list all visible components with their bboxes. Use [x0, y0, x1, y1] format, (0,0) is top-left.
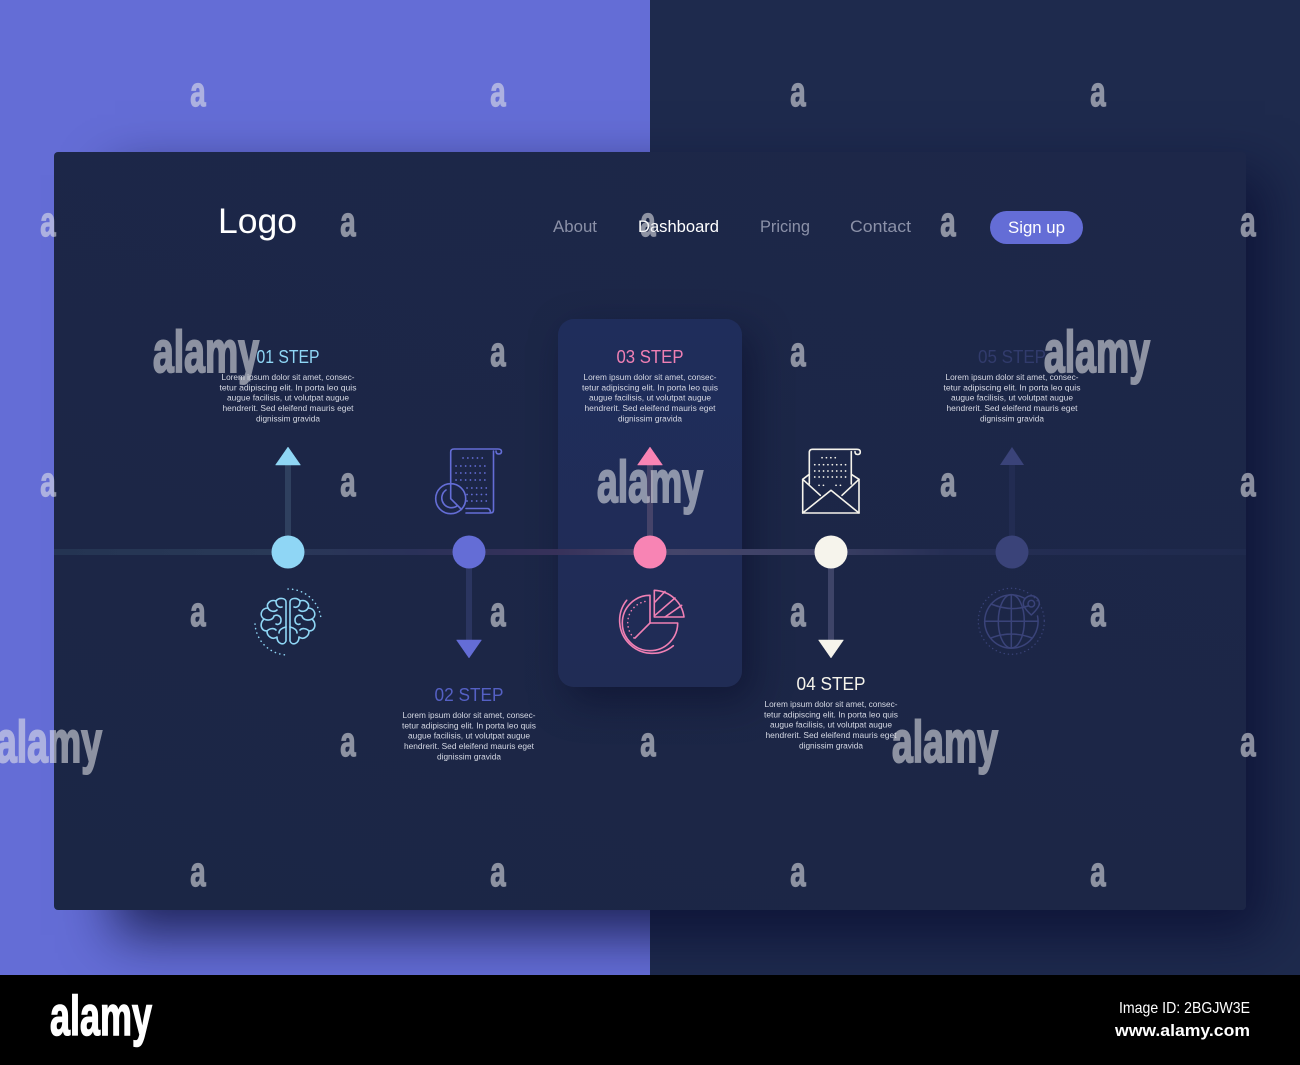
- node: step 4: [814, 536, 848, 568]
- watermarks: a: [1240, 198, 1257, 245]
- heading: 02 step: 02 STEP: [434, 685, 504, 705]
- watermarks: a: [340, 198, 357, 245]
- icon: report with pie chart: [436, 449, 502, 514]
- text block: step 1: [220, 372, 356, 423]
- icon: envelope with letter: [803, 449, 860, 513]
- text block: step 5: augue facilisis, ut volutpat augue: [951, 393, 1073, 403]
- step 5: [944, 347, 1080, 654]
- footer text: [50, 984, 1250, 1047]
- footer bar background: [0, 975, 1300, 1065]
- watermarks: a: [490, 68, 507, 115]
- website: www.alamy.com: [1114, 1021, 1250, 1040]
- watermarks: a: [190, 68, 207, 115]
- text block: step 5: [944, 372, 1080, 423]
- watermarks: a: [1090, 68, 1107, 115]
- text block: step 5: Lorem ipsum dolor sit amet, consec-: [946, 372, 1079, 382]
- text block: step 3: Lorem ipsum dolor sit amet, consec-: [584, 372, 717, 382]
- text block: step 2: hendrerit. Sed eleifend mauris eget: [404, 741, 535, 751]
- text block: step 3: augue facilisis, ut volutpat augue: [589, 393, 711, 403]
- watermarks: a: [1240, 458, 1257, 505]
- text block: step 4: Lorem ipsum dolor sit amet, consec-: [764, 699, 898, 709]
- node: step 3: [634, 536, 666, 568]
- node: step 1: [272, 536, 304, 568]
- text block: step 1: augue facilisis, ut volutpat augue: [227, 393, 349, 403]
- watermarks: a: [40, 198, 57, 245]
- step 4: [764, 449, 898, 750]
- watermarks: a: [790, 328, 807, 375]
- text block: step 2: augue facilisis, ut volutpat augue: [408, 731, 530, 741]
- text block: step 5: tetur adipiscing elit. In porta leo quis: [944, 382, 1080, 392]
- icon: globe with pin: [978, 588, 1044, 654]
- text block: step 4: augue facilisis, ut volutpat augue: [770, 720, 892, 730]
- nav link: pricing: Pricing: [760, 217, 810, 236]
- sign up button: [990, 211, 1083, 244]
- heading: 04 step: 04 STEP: [796, 674, 866, 694]
- icon: brain: [255, 589, 321, 655]
- footer logo: alamy: [50, 984, 152, 1047]
- text block: step 3: [582, 372, 718, 423]
- watermarks: a: [340, 718, 357, 765]
- watermarks: a: [190, 588, 207, 635]
- text block: step 4: hendrerit. Sed eleifend mauris eget: [766, 730, 897, 740]
- text block: step 4: dignissim gravida: [799, 740, 863, 750]
- text block: step 3: tetur adipiscing elit. In porta leo quis: [582, 382, 718, 392]
- arrow down: step 2: [456, 565, 482, 658]
- watermarks: a: [40, 458, 57, 505]
- node: step 2: [452, 536, 486, 568]
- arrow up: step 1: [276, 447, 300, 539]
- watermarks: a: [190, 848, 207, 895]
- watermarks: a: [1240, 718, 1257, 765]
- watermarks: a: [940, 458, 957, 505]
- main card panel: [54, 152, 1246, 910]
- nav link: contact: Contact: [850, 217, 911, 236]
- text block: step 1: dignissim gravida: [256, 413, 320, 423]
- text block: step 4: [764, 699, 898, 750]
- icon: pie chart: [620, 590, 684, 653]
- text block: step 2: tetur adipiscing elit. In porta leo quis: [402, 720, 536, 730]
- card shadow: [160, 220, 1220, 890]
- nav link: about: About: [553, 217, 597, 236]
- timeline bar: [54, 549, 1246, 555]
- watermarks: a: [490, 848, 507, 895]
- watermarks: a: [490, 328, 507, 375]
- text block: step 1: hendrerit. Sed eleifend mauris eget: [222, 403, 354, 413]
- heading: 05 step: 05 STEP: [978, 347, 1046, 367]
- step 1: [220, 347, 356, 655]
- header navigation: [218, 202, 1083, 244]
- text block: step 3: hendrerit. Sed eleifend mauris eget: [584, 403, 716, 413]
- watermarks: a: [340, 458, 357, 505]
- text block: step 1: Lorem ipsum dolor sit amet, consec-: [222, 372, 355, 382]
- watermarks: a: [1090, 848, 1107, 895]
- text block: step 1: tetur adipiscing elit. In porta leo quis: [220, 382, 356, 392]
- arrow up: step 3: [638, 447, 662, 539]
- nav link: dashboard: Dashboard: [638, 217, 719, 236]
- text block: step 2: [402, 710, 536, 761]
- watermarks: [0, 68, 1257, 895]
- text block: step 2: Lorem ipsum dolor sit amet, consec-: [402, 710, 536, 720]
- image id: Image ID: 2BGJW3E: [1119, 1000, 1250, 1017]
- text block: step 5: dignissim gravida: [980, 413, 1044, 423]
- watermarks: a: [640, 718, 657, 765]
- watermarks: a: [1090, 588, 1107, 635]
- watermarks: a: [490, 588, 507, 635]
- watermarks: alamy: [1044, 320, 1150, 385]
- watermarks: a: [790, 68, 807, 115]
- text block: step 4: tetur adipiscing elit. In porta leo quis: [764, 709, 898, 719]
- background: purple half: [0, 0, 650, 975]
- arrow up: step 5: [1000, 447, 1024, 539]
- text block: step 5: hendrerit. Sed eleifend mauris eget: [946, 403, 1078, 413]
- watermarks: alamy: [597, 450, 703, 515]
- text block: step 3: dignissim gravida: [618, 413, 682, 423]
- watermarks: alamy: [892, 710, 998, 775]
- node: step 5: [996, 536, 1028, 568]
- watermarks: a: [640, 198, 657, 245]
- watermarks: a: [790, 848, 807, 895]
- step 3: [582, 347, 718, 653]
- heading: 01 step: 01 STEP: [256, 347, 320, 367]
- watermarks: alamy: [0, 710, 102, 775]
- heading: 03 step: 03 STEP: [616, 347, 684, 367]
- highlighted panel: step 3: [558, 319, 742, 687]
- arrow down: step 4: [818, 565, 844, 658]
- watermarks: alamy: [153, 320, 259, 385]
- sign up button: Sign up: [1008, 218, 1065, 237]
- step 2: [402, 449, 536, 761]
- text block: step 2: dignissim gravida: [437, 751, 501, 761]
- watermarks: a: [940, 198, 957, 245]
- background: navy half: [650, 0, 1300, 975]
- watermarks: a: [790, 588, 807, 635]
- logo: Logo: [218, 202, 297, 241]
